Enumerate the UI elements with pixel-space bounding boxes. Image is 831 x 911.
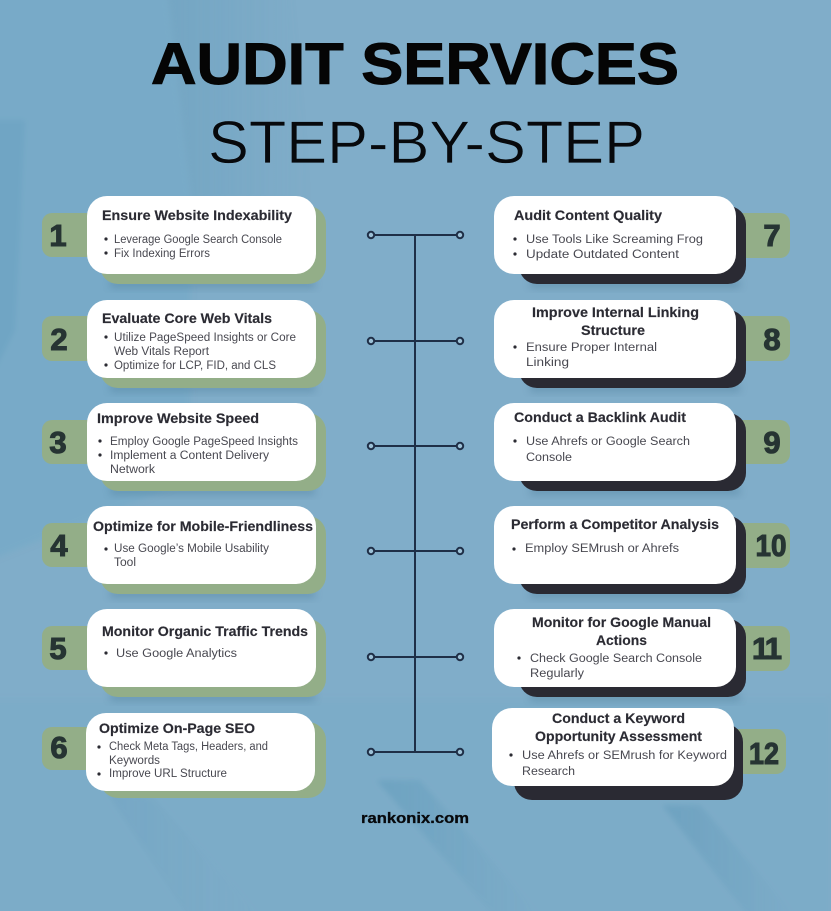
step 2: 2 <box>50 322 68 357</box>
step 6: Keywords <box>109 755 160 767</box>
step 7: Update Outdated Content <box>526 249 680 261</box>
title: STEP-BY-STEP <box>208 109 645 176</box>
step 5: Use Google Analytics <box>116 648 237 660</box>
step 2: Web Vitals Report <box>114 346 210 358</box>
step 11: Monitor for Google Manual <box>532 615 711 630</box>
step 11: Regularly <box>530 668 584 680</box>
step 2: Evaluate Core Web Vitals <box>102 311 272 326</box>
step 7: 7 <box>763 218 781 253</box>
step 7: Use Tools Like Screaming Frog <box>526 234 703 246</box>
step 9: 9 <box>763 425 781 460</box>
step 6: Optimize On-Page SEO <box>99 721 255 736</box>
step 12: Use Ahrefs or SEMrush for Keyword <box>522 750 727 762</box>
step 4: Optimize for Mobile-Friendliness <box>93 519 313 534</box>
step 3: Implement a Content Delivery <box>110 450 269 462</box>
step 8: Structure <box>581 323 646 338</box>
step 6: Check Meta Tags, Headers, and <box>109 741 268 753</box>
step 4: Tool <box>114 557 136 569</box>
step 2 <box>42 300 326 392</box>
step 4: 4 <box>50 528 68 563</box>
step 1 <box>42 196 326 288</box>
step 10: Perform a Competitor Analysis <box>511 517 719 532</box>
step 6: Improve URL Structure <box>109 768 227 780</box>
step 3: Network <box>110 464 155 476</box>
step 10: 10 <box>756 528 786 563</box>
step 11: Actions <box>596 633 647 648</box>
step 12: 12 <box>749 736 779 771</box>
step 8: Ensure Proper Internal <box>526 342 657 354</box>
step 6: 6 <box>50 730 68 765</box>
step 5: 5 <box>49 631 67 666</box>
step 9: Console <box>526 452 572 464</box>
step 10: Employ SEMrush or Ahrefs <box>525 543 679 555</box>
step 6 <box>42 713 326 798</box>
step 3: Employ Google PageSpeed Insights <box>110 436 298 448</box>
step 8: Linking <box>526 357 569 369</box>
step 5 <box>42 609 326 701</box>
step 12: Opportunity Assessment <box>535 729 703 744</box>
title <box>151 32 679 176</box>
step 2: Utilize PageSpeed Insights or Core <box>114 332 296 344</box>
step 1: 1 <box>49 218 67 253</box>
step 3 <box>42 403 326 495</box>
step 4 <box>42 506 326 598</box>
step 3: Improve Website Speed <box>97 411 259 426</box>
step 8: Improve Internal Linking <box>532 305 699 320</box>
step 3: 3 <box>49 425 67 460</box>
footer url: rankonix.com <box>361 810 469 827</box>
step 9: Use Ahrefs or Google Search <box>526 436 690 448</box>
step 12 <box>492 708 786 800</box>
step 1: Leverage Google Search Console <box>114 234 282 246</box>
step 2: Optimize for LCP, FID, and CLS <box>114 360 276 372</box>
step 1: Ensure Website Indexability <box>102 208 293 223</box>
step 9 <box>494 403 790 495</box>
step 8: 8 <box>763 322 781 357</box>
step 12: Conduct a Keyword <box>552 711 685 726</box>
step 7: Audit Content Quality <box>514 208 663 223</box>
step 8 <box>494 300 790 392</box>
title: AUDIT SERVICES <box>151 32 679 97</box>
timeline connector <box>368 232 463 755</box>
step 7 <box>494 196 790 288</box>
step 11 <box>494 609 790 701</box>
step 11: Check Google Search Console <box>530 653 702 665</box>
step 9: Conduct a Backlink Audit <box>514 410 687 425</box>
step 12: Research <box>522 766 575 778</box>
step 11: 11 <box>752 631 782 666</box>
step 4: Use Google’s Mobile Usability <box>114 543 269 555</box>
step 5: Monitor Organic Traffic Trends <box>102 624 308 639</box>
step 1: Fix Indexing Errors <box>114 248 210 260</box>
step 10 <box>494 506 790 598</box>
